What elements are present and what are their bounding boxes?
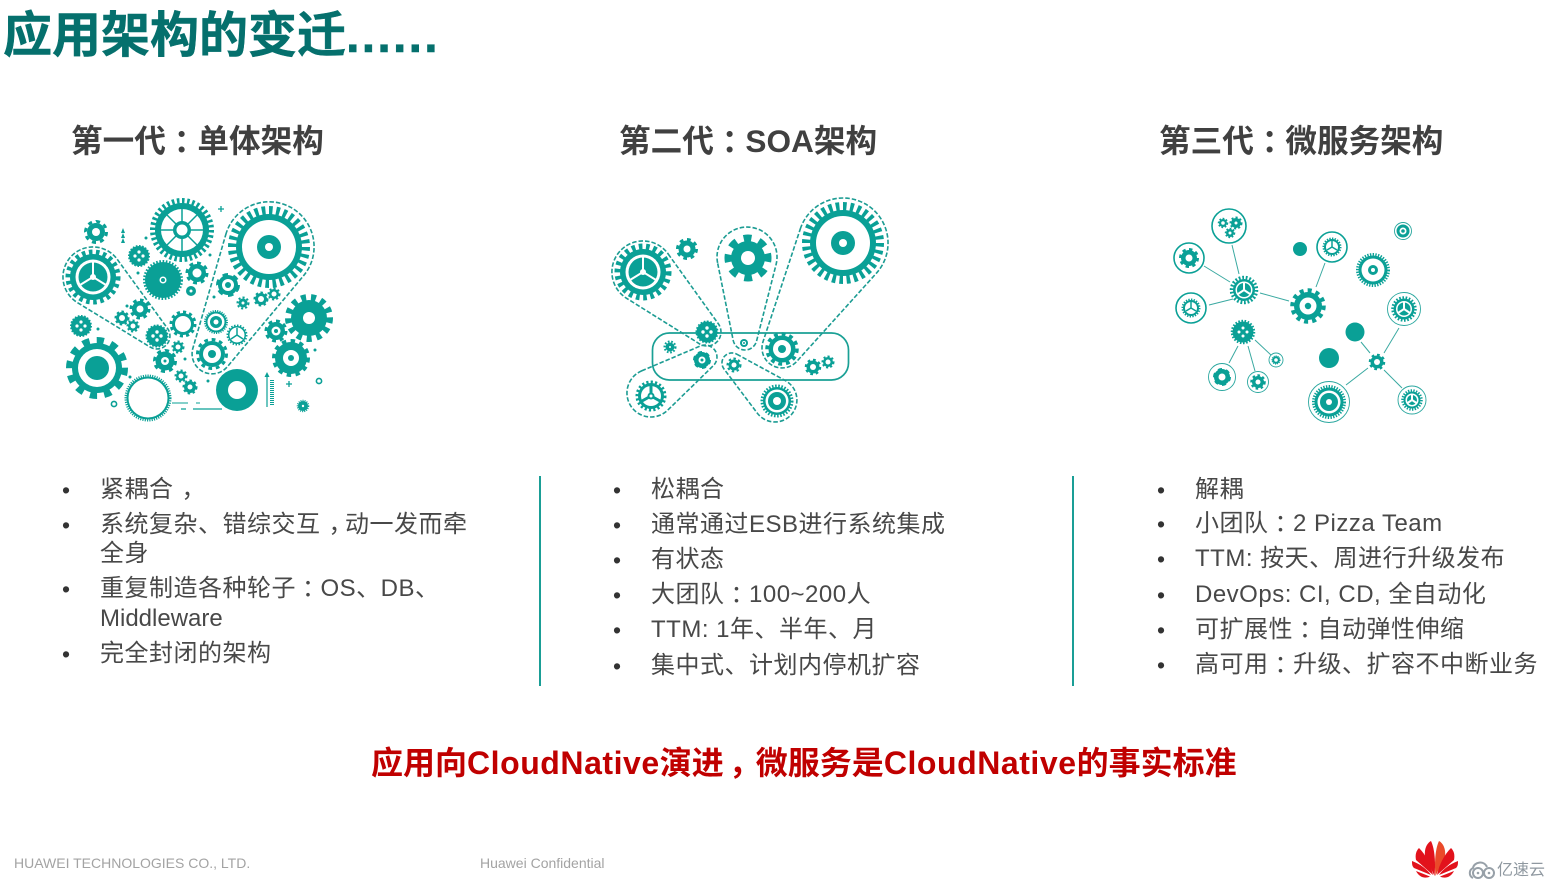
bullet — [1157, 476, 1244, 503]
heading: third generation: 第三代 ：微服务架构 — [1159, 123, 1443, 159]
bullet list: third generation: DevOps: CI, CD, 全自动化 — [1195, 581, 1486, 608]
bullet list: first generation: 完全封闭的架构 — [100, 640, 272, 667]
bullet list: third generation: • — [1157, 477, 1166, 503]
bullet list: third generation: 小团队：2 Pizza Team — [1195, 510, 1443, 537]
dashed belts — [63, 202, 314, 374]
bullet list: first generation: • — [62, 477, 71, 503]
watermark text: 亿速云 — [1497, 862, 1545, 879]
node: tri gear in circle — [1176, 293, 1206, 323]
bullet list: third generation: 解耦 — [1195, 476, 1244, 503]
star gear right — [288, 298, 330, 338]
medium gears — [71, 222, 308, 412]
bullet — [1157, 545, 1505, 572]
node: large ring gear — [1308, 382, 1350, 422]
bullet — [613, 546, 724, 573]
node: tri gear bottom right — [1398, 386, 1426, 414]
node: tri gear right — [1388, 292, 1420, 326]
bullet — [613, 652, 920, 679]
donut — [216, 369, 258, 411]
bullet list: first generation: • — [62, 512, 71, 538]
callout: 应用向CloudNative演进，微服务是CloudNative的事实标准 — [371, 745, 1237, 781]
footer: company: HUAWEI TECHNOLOGIES CO., LTD. — [14, 854, 250, 870]
centre gear — [725, 235, 771, 281]
bullet list: second generation: • — [613, 617, 622, 643]
icon: SOA gear cluster — [611, 197, 889, 423]
bullet list: third generation — [1157, 476, 1538, 678]
bullet list: second generation: • — [613, 653, 622, 679]
bullet — [613, 511, 946, 538]
icon: monolith gear cluster — [62, 198, 333, 422]
large gear — [806, 206, 880, 280]
bullet list: second generation: 通常通过ESB进行系统集成 — [651, 511, 946, 538]
bullet list: third generation: • — [1157, 582, 1166, 608]
tri-spoke gear left — [68, 252, 118, 302]
bullet list: second generation: • — [613, 512, 622, 538]
small target node — [1394, 222, 1412, 240]
smaller gears — [637, 240, 834, 416]
icon: Huawei logo — [1412, 841, 1458, 878]
bullet — [613, 616, 877, 643]
connector lines — [1204, 245, 1402, 388]
footer: confidentiality: Huawei Confidential — [480, 854, 605, 870]
bullet list: third generation: 高可用：升级、扩容不中断业务 — [1195, 651, 1538, 678]
heading: first generation: 第一代 ：单体架构 — [71, 123, 324, 159]
bullet list: first generation: • — [62, 641, 71, 667]
solid fine-tooth gear — [144, 262, 182, 298]
bullet list: second generation: 集中式、计划内停机扩容 — [651, 652, 920, 679]
bullet list: first generation — [62, 476, 468, 667]
bullet list: first generation: • — [62, 576, 71, 602]
bullet — [1157, 651, 1538, 678]
divider — [539, 476, 541, 686]
large gear top right — [232, 210, 306, 284]
service bus rounded frame — [652, 333, 848, 380]
bullet list: second generation: • — [613, 547, 622, 573]
node: three small gears — [1212, 209, 1246, 243]
bottom-left gear — [70, 341, 124, 395]
bullet list: second generation: 松耦合 — [651, 476, 724, 503]
heading: second generation: 第二代 ：SOA架构 — [619, 123, 877, 159]
dashed belts — [612, 198, 888, 422]
bullet list: second generation: TTM: 1年、半年、月 — [651, 616, 877, 643]
bullet list: second generation: • — [613, 582, 622, 608]
bullet — [62, 640, 272, 667]
bullet list: third generation: • — [1157, 546, 1166, 572]
bullet list: first generation: 系统复杂、错综交互 ，动一发而牵 — [100, 511, 468, 538]
hub gear with tri spokes — [1232, 278, 1256, 302]
node: small gear — [1248, 372, 1268, 392]
solid dots — [1293, 242, 1364, 368]
divider — [1072, 476, 1074, 686]
hub gear with dots — [1232, 321, 1254, 343]
spoked gear — [153, 201, 211, 259]
standalone ring gear — [1358, 254, 1388, 286]
bullet list: second generation — [613, 476, 946, 679]
bullet list: first generation: 全身 — [100, 540, 149, 567]
hub gear small — [1370, 355, 1384, 369]
node: gear in circle — [1174, 243, 1204, 273]
hub gear large — [1292, 290, 1324, 322]
bullet — [1157, 581, 1486, 608]
node: tiny gear — [1269, 353, 1283, 367]
bullet list: first generation: Middleware — [100, 605, 223, 632]
small decorations — [96, 206, 322, 409]
bullet — [613, 476, 724, 503]
bullet list: first generation: 紧耦合 ， — [100, 476, 206, 503]
bullet list: third generation: • — [1157, 652, 1166, 678]
icon: cloud — [1468, 862, 1495, 879]
bullet list: first generation: 重复制造各种轮子：OS、DB、 — [100, 575, 440, 602]
bullet — [62, 575, 440, 602]
bullet — [62, 511, 468, 538]
bullet list: second generation: 大团队：100~200人 — [651, 581, 871, 608]
bullet — [62, 476, 206, 503]
bullet list: third generation: TTM: 按天、周进行升级发布 — [1195, 545, 1505, 572]
bullet list: third generation: • — [1157, 511, 1166, 537]
bullet list: third generation: 可扩展性：自动弹性伸缩 — [1195, 616, 1464, 643]
bullet — [1157, 616, 1464, 643]
bullet list: second generation: • — [613, 477, 622, 503]
bullet list: second generation: 有状态 — [651, 546, 724, 573]
tri-spoke gear — [618, 246, 668, 298]
bullet — [613, 581, 871, 608]
node: tri gear top centre — [1317, 232, 1347, 262]
bullet list: third generation: • — [1157, 617, 1166, 643]
title: 应用架构的变迁...... — [3, 9, 440, 63]
bullet — [1157, 510, 1443, 537]
watermark logo — [1468, 861, 1545, 879]
node: hex nut — [1208, 364, 1236, 390]
icon: microservice gear network — [1173, 208, 1426, 423]
thin ring gear — [126, 376, 170, 420]
